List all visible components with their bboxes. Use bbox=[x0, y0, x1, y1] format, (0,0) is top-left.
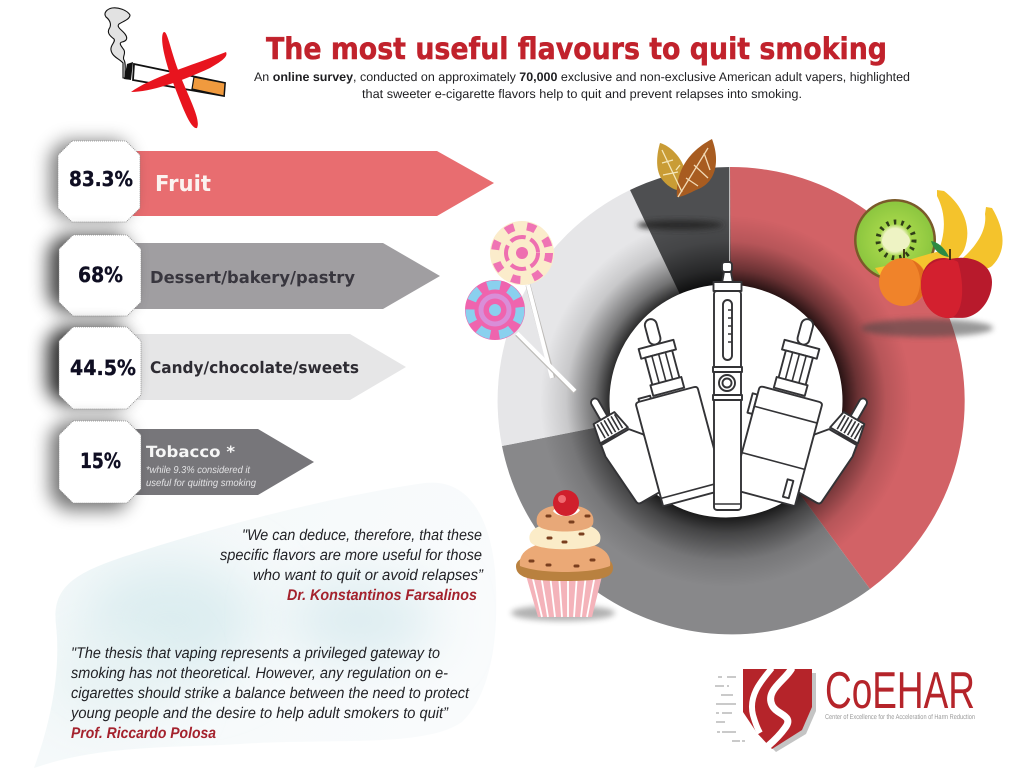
panel: dessert bar bbox=[48, 235, 440, 316]
intro text: An online survey, conducted on approximately 70,000 exclusive and non-exclusive American adult vapers, highlighted bbox=[254, 70, 910, 84]
footnote bbox=[146, 465, 256, 489]
badge: 15% bbox=[59, 421, 141, 503]
pink lollipop bbox=[490, 221, 554, 285]
right bottle bbox=[785, 386, 881, 507]
quote: Farsalinos: Dr. Konstantinos Farsalinos bbox=[287, 587, 477, 604]
inner shadow bbox=[526, 201, 926, 601]
centre disc bbox=[610, 285, 842, 517]
quote: Farsalinos: specific flavors are more useful for those bbox=[220, 547, 482, 564]
kiwi bbox=[854, 199, 936, 281]
panel: quotes background bbox=[34, 495, 470, 768]
label: Fruit: Fruit bbox=[155, 172, 211, 197]
value: 68%: 68% bbox=[78, 263, 123, 287]
icon: lollipops bbox=[465, 221, 575, 392]
panel: candy bar bbox=[47, 327, 406, 409]
left bottle bbox=[577, 386, 673, 507]
quote: Polosa: smoking has not theoretical. However, any regulation on e- bbox=[71, 665, 448, 682]
icon: fruit bbox=[854, 190, 1003, 337]
intro text bbox=[254, 70, 910, 101]
banana bbox=[952, 207, 1003, 270]
icon: tobacco leaves bbox=[637, 139, 723, 230]
stick bbox=[517, 334, 575, 392]
label: Tobacco: Tobacco * bbox=[146, 443, 235, 461]
icon: crossed-out cigarette bbox=[105, 8, 226, 128]
panel: fruit bar bbox=[50, 141, 494, 222]
segment: fruit bbox=[730, 167, 965, 589]
badge: 83.3% bbox=[58, 141, 140, 222]
label: Candy/chocolate/sweets: Candy/chocolate/sweets bbox=[150, 358, 359, 377]
left mod bbox=[615, 312, 725, 506]
right mod bbox=[727, 310, 843, 506]
quote: Polosa bbox=[70, 645, 470, 742]
icon: cupcake bbox=[511, 490, 615, 621]
quote: Polosa: Prof. Riccardo Polosa bbox=[71, 725, 216, 742]
peach bbox=[879, 258, 927, 306]
icon: vaping devices bbox=[577, 262, 881, 510]
value: 44.5%: 44.5% bbox=[70, 356, 136, 380]
value: 15%: 15% bbox=[80, 449, 121, 473]
value: 83.3%: 83.3% bbox=[69, 167, 133, 191]
quote: Polosa: cigarettes should strike a balance between the need to protect bbox=[71, 685, 470, 702]
donut chart bbox=[498, 167, 965, 634]
logo: CoEHAR bbox=[715, 662, 975, 752]
centre pen bbox=[713, 262, 742, 510]
badge: 44.5% bbox=[59, 327, 141, 409]
apple bbox=[921, 258, 992, 318]
blue lollipop bbox=[465, 280, 525, 340]
decorative dashes bbox=[715, 677, 745, 741]
panel: tobacco bar bbox=[50, 421, 314, 510]
tagline: Center of Excellence for the Acceleration of Harm Reduction bbox=[825, 713, 975, 721]
footnote: useful for quitting smoking bbox=[146, 478, 256, 489]
quote: Polosa: young people and the desire to help adult smokers to quit” bbox=[70, 705, 449, 722]
quote: Polosa: "The thesis that vaping represents a privileged gateway to bbox=[71, 645, 440, 662]
segment: tobacco bbox=[630, 167, 731, 401]
footnote: *while 9.3% considered it bbox=[146, 465, 251, 476]
intro text: that sweeter e-cigarette flavors help to quit and prevent relapses into smoking. bbox=[362, 87, 802, 101]
banana bbox=[925, 190, 967, 275]
label: Dessert/bakery/pastry: Dessert/bakery/pastry bbox=[150, 268, 355, 287]
segment: candy bbox=[498, 190, 731, 446]
badge: 68% bbox=[59, 235, 141, 316]
title: The most useful flavours to quit smoking bbox=[266, 32, 887, 67]
quote: Farsalinos: who want to quit or avoid relapses” bbox=[253, 567, 484, 584]
segment: dessert bbox=[502, 401, 870, 634]
shield bbox=[743, 668, 816, 752]
quote: Farsalinos: "We can deduce, therefore, that these bbox=[242, 527, 482, 544]
stick bbox=[528, 285, 553, 378]
quote: Farsalinos bbox=[220, 527, 484, 604]
